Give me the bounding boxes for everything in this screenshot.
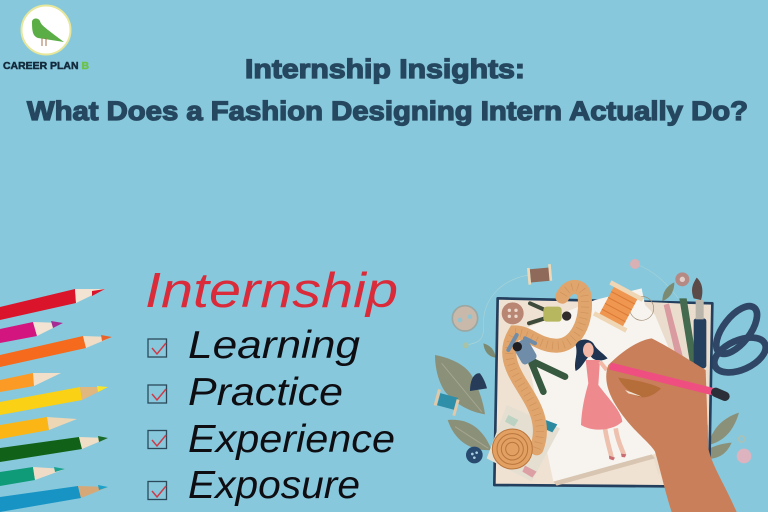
- drawing hand: [606, 338, 737, 512]
- item: Exposure: Exposure: [188, 464, 360, 507]
- sketchbook frame: [494, 298, 712, 487]
- tiny designer figure: blue shirt: [508, 335, 565, 392]
- logo wordmark: CAREER PLAN B: [3, 60, 89, 72]
- buttons: [452, 259, 751, 463]
- item: Learning: Learning: [188, 324, 360, 367]
- tiny designer figure: olive shirt: [529, 303, 571, 323]
- pencil: golden: [0, 417, 77, 439]
- title: [27, 54, 748, 126]
- pencil: orange: [0, 335, 112, 367]
- paintbrush and pencils: [664, 278, 708, 435]
- fabric swatches: [487, 405, 560, 482]
- coloured pencils: [0, 289, 112, 512]
- ring of thread: [630, 296, 654, 320]
- tape measure: [509, 287, 585, 448]
- item: Experience: Experience: [188, 418, 395, 461]
- thread lines: [467, 265, 678, 345]
- hand pencil: [610, 366, 725, 396]
- item: Practice: Practice: [188, 371, 343, 414]
- thimble: [470, 373, 487, 391]
- scissors: [709, 299, 768, 380]
- white paper sheet: [522, 288, 705, 482]
- spools: [434, 264, 552, 416]
- icon: bird badge: [22, 6, 70, 54]
- pencil: blue: [0, 485, 108, 512]
- pencil: green: [0, 436, 108, 462]
- tape roll: [492, 429, 532, 469]
- title line 1: Internship Insights:: [245, 54, 525, 84]
- pencil: yellow: [0, 386, 108, 415]
- pencil: red: [0, 289, 105, 320]
- sketched girl in pink dress: [575, 339, 626, 460]
- leaves left: [435, 343, 496, 450]
- logo: Career Plan B: [3, 6, 89, 72]
- pencil: light orange: [0, 373, 61, 392]
- fashion design illustration: [434, 259, 768, 512]
- orange spool: [593, 280, 644, 333]
- large sewing button: [502, 302, 524, 324]
- pencil: magenta: [0, 321, 63, 343]
- beige inner page: [625, 302, 710, 475]
- leaves right: [662, 282, 739, 459]
- checklist: [145, 264, 398, 507]
- heading: Internship: Internship: [145, 264, 398, 318]
- pencil: teal: [0, 467, 65, 486]
- title line 2: What Does a Fashion Designing Intern Actually Do?: [27, 96, 748, 126]
- paper shadow edge: [553, 454, 655, 486]
